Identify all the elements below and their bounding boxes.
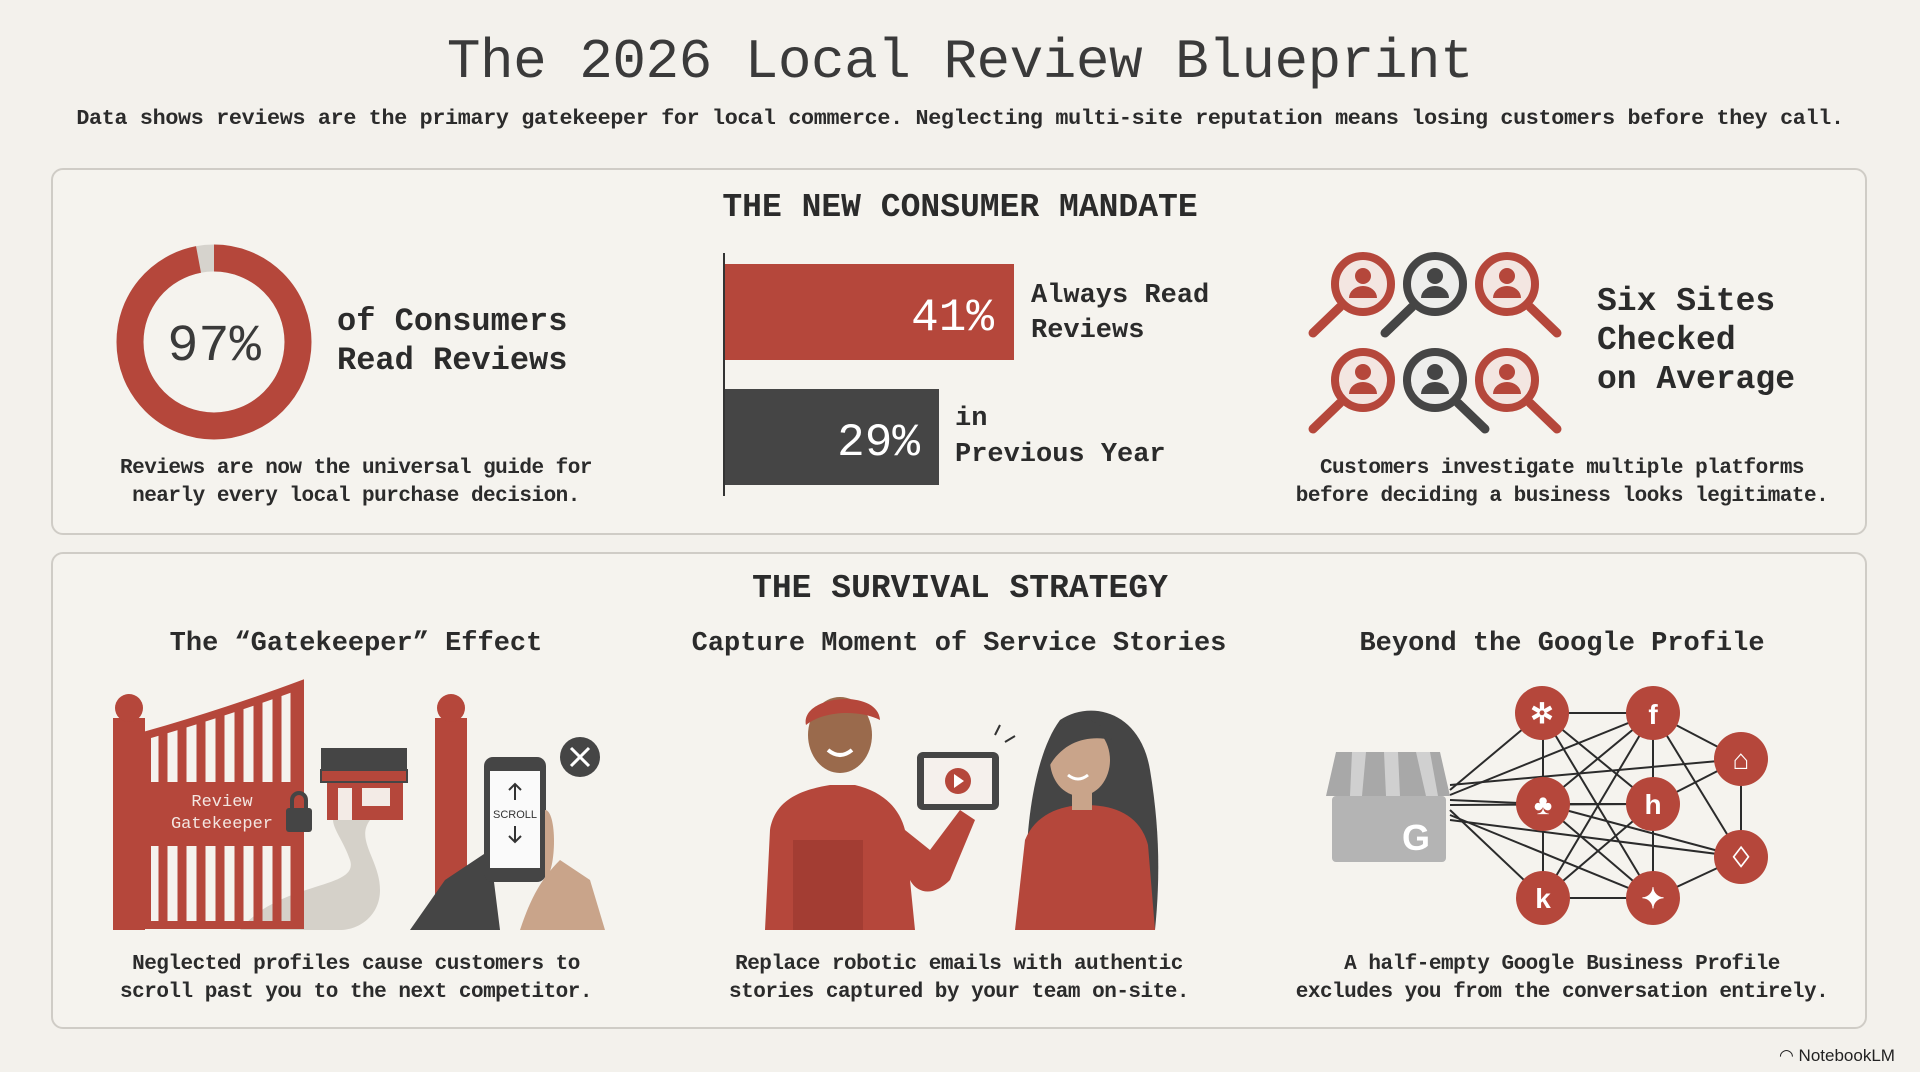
caption: reviews guide bbox=[120, 457, 592, 508]
illustration: gatekeeper gate: Gatekeeper bbox=[171, 815, 273, 834]
illustration: network: ♣ bbox=[1534, 789, 1552, 820]
bar label: always read: Always Read bbox=[1031, 281, 1209, 311]
bar chart bbox=[724, 253, 1014, 496]
donut chart 97%: 97% bbox=[167, 317, 262, 376]
illustration: technician with tablet bbox=[765, 697, 1015, 930]
stat: of consumers read reviews: of Consumers bbox=[337, 303, 567, 340]
illustration: network: ✦ bbox=[1641, 883, 1665, 914]
caption: gatekeeper: Neglected profiles cause customers to bbox=[132, 953, 580, 976]
stat: of consumers read reviews: Read Reviews bbox=[337, 342, 567, 379]
caption: capture: stories captured by your team on-site. bbox=[729, 981, 1189, 1004]
caption: google: excludes you from the conversation entirely. bbox=[1296, 981, 1828, 1004]
caption: gatekeeper: scroll past you to the next competitor. bbox=[120, 981, 592, 1004]
caption: capture: Replace robotic emails with authentic bbox=[735, 953, 1183, 976]
caption: reviews guide: Reviews are now the universal guide for bbox=[120, 457, 592, 480]
panel: survival strategy bbox=[51, 552, 1867, 1029]
icons: magnifiers bbox=[1313, 256, 1557, 429]
heading: survival strategy: THE SURVIVAL STRATEGY bbox=[752, 570, 1168, 607]
illustration: woman bbox=[1015, 711, 1158, 930]
illustration: store bbox=[321, 748, 407, 820]
bar label: previous year: Previous Year bbox=[955, 440, 1166, 470]
subtitle: Data shows reviews are the primary gatekeeper for local commerce. Neglecting multi-site reputation means losing customers before they call. bbox=[76, 106, 1844, 131]
illustration: network: k bbox=[1535, 883, 1551, 914]
illustration: gatekeeper gate: Review bbox=[191, 793, 253, 812]
bar chart: 29% bbox=[837, 417, 920, 469]
bar label: always read bbox=[1031, 281, 1209, 346]
subheading: gatekeeper: The “Gatekeeper” Effect bbox=[170, 629, 542, 659]
subheading: capture: Capture Moment of Service Stories bbox=[692, 629, 1226, 659]
illustration: network: ⌂ bbox=[1733, 744, 1749, 775]
stat: six sites: Checked bbox=[1597, 322, 1736, 359]
bar label: previous year: in bbox=[955, 404, 987, 434]
heading: consumer mandate: THE NEW CONSUMER MANDATE bbox=[722, 189, 1198, 226]
illustration: network: ♢ bbox=[1728, 842, 1754, 873]
illustration: network: f bbox=[1648, 699, 1658, 730]
logo: NotebookLM: ◠ NotebookLM bbox=[1779, 1046, 1895, 1065]
caption: platforms bbox=[1296, 457, 1828, 508]
caption: google bbox=[1296, 953, 1828, 1004]
bar label: previous year bbox=[955, 404, 1166, 470]
illustration: phone scroll: SCROLL bbox=[493, 809, 537, 821]
caption: reviews guide: nearly every local purchase decision. bbox=[132, 485, 580, 508]
caption: google: A half-empty Google Business Profile bbox=[1344, 953, 1780, 976]
illustration: network bbox=[1326, 686, 1768, 925]
stat: six sites: on Average bbox=[1597, 361, 1795, 398]
title: The 2026 Local Review Blueprint bbox=[447, 30, 1473, 94]
stat: of consumers read reviews bbox=[337, 303, 567, 379]
illustration: network: G bbox=[1402, 817, 1430, 858]
illustration: network: h bbox=[1644, 789, 1662, 820]
bar label: always read: Reviews bbox=[1031, 316, 1144, 346]
illustration: phone scroll bbox=[410, 737, 605, 930]
donut chart 97% bbox=[130, 258, 298, 426]
stat: six sites: Six Sites bbox=[1597, 283, 1775, 320]
caption: platforms: Customers investigate multiple platforms bbox=[1320, 457, 1804, 480]
illustration: network: ✲ bbox=[1530, 698, 1554, 729]
subheading: beyond google: Beyond the Google Profile bbox=[1359, 629, 1765, 659]
stat: six sites bbox=[1597, 283, 1795, 398]
bar chart: 41% bbox=[911, 292, 994, 344]
caption: gatekeeper bbox=[120, 953, 592, 1004]
illustration: gatekeeper gate bbox=[113, 685, 467, 930]
panel: consumer mandate bbox=[51, 168, 1867, 535]
caption: platforms: before deciding a business looks legitimate. bbox=[1296, 485, 1828, 508]
caption: capture bbox=[729, 953, 1189, 1004]
